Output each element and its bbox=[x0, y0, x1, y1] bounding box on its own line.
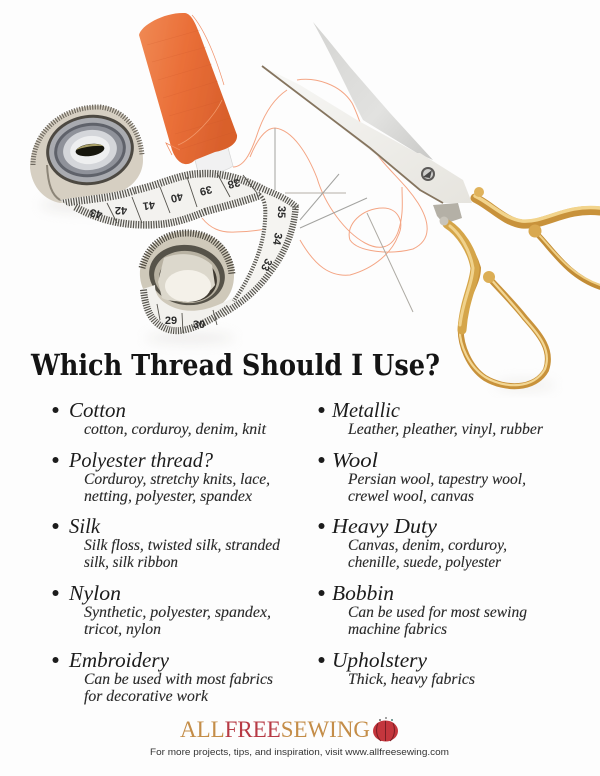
photo shadows bbox=[40, 197, 555, 390]
item: Embroidery: Embroidery bbox=[68, 648, 170, 672]
tape measure: numbers: 38 bbox=[226, 176, 241, 190]
item: Nylon: Synthetic, polyester, spandex, bbox=[84, 604, 271, 621]
item: Silk: Silk bbox=[69, 514, 101, 538]
scissors: left shank bbox=[433, 203, 462, 224]
item: Polyester thread: Corduroy, stretchy knits, lace, bbox=[84, 471, 270, 488]
item: Embroidery: Can be used with most fabrics bbox=[84, 671, 273, 688]
item: Wool bbox=[318, 448, 526, 505]
title: Which Thread Should I Use? bbox=[30, 348, 440, 382]
item: Heavy Duty: Heavy Duty bbox=[331, 514, 438, 538]
top roll: coil bbox=[42, 109, 138, 191]
tape measure: numbers: 39 bbox=[198, 183, 213, 197]
item: Heavy Duty bbox=[318, 514, 507, 571]
item: Nylon: Nylon bbox=[68, 581, 121, 605]
footer text: For more projects, tips, and inspiration, visit www.allfreesewing.com bbox=[150, 747, 449, 758]
item: Silk: silk, silk ribbon bbox=[84, 554, 178, 571]
item: Cotton: cotton, corduroy, denim, knit bbox=[84, 421, 267, 438]
item: Nylon: tricot, nylon bbox=[84, 621, 161, 638]
item: Wool: Persian wool, tapestry wool, bbox=[347, 471, 526, 488]
item: Upholstery: Upholstery bbox=[332, 648, 428, 672]
item: Metallic bbox=[318, 398, 544, 438]
thread spool bbox=[139, 13, 237, 174]
top roll: centre hole bbox=[75, 142, 105, 158]
item: Upholstery bbox=[318, 648, 475, 688]
tape measure: numbers: 30 bbox=[193, 319, 205, 331]
scissors: pivot screw bbox=[421, 167, 435, 181]
item: Wool: Wool bbox=[332, 448, 378, 472]
tape measure: top roll bbox=[30, 105, 143, 203]
scissors: rear blade bbox=[313, 22, 433, 160]
item: Heavy Duty: Canvas, denim, corduroy, bbox=[348, 537, 507, 554]
item: Wool: crewel wool, canvas bbox=[348, 488, 474, 505]
ribbon: middle section bbox=[60, 170, 267, 229]
footer logo wordmark: ALLFREESEWING bbox=[180, 717, 370, 742]
ribbon: right section bbox=[222, 186, 299, 318]
tape measure: numbers: 43 bbox=[89, 206, 103, 220]
scissors bbox=[262, 22, 600, 386]
item: Upholstery: Thick, heavy fabrics bbox=[348, 671, 475, 688]
photo: sewing supplies bbox=[30, 13, 600, 390]
tape measure: numbers: 40 bbox=[169, 190, 184, 204]
icon: pincushion bbox=[373, 717, 398, 742]
item: Metallic: Leather, pleather, vinyl, rubber bbox=[347, 421, 544, 438]
tape measure: numbers bbox=[89, 176, 287, 331]
ribbon: lower section bbox=[140, 285, 234, 334]
item: Polyester thread bbox=[52, 448, 270, 505]
item: Metallic: Metallic bbox=[331, 398, 401, 422]
scissors: right gold handle bbox=[474, 187, 600, 287]
item: Embroidery bbox=[52, 648, 273, 705]
tape measure: numbers: 29 bbox=[165, 315, 177, 327]
item: Nylon bbox=[52, 581, 271, 638]
tape measure: numbers: 35 bbox=[275, 206, 287, 218]
item: Embroidery: for decorative work bbox=[84, 688, 209, 705]
tape measure: bottom roll bbox=[140, 231, 234, 315]
item: Bobbin: Can be used for most sewing bbox=[348, 604, 527, 621]
right column: thread list bbox=[318, 398, 544, 688]
tape measure: numbers: 34 bbox=[270, 232, 284, 247]
item: Heavy Duty: chenille, suede, polyester bbox=[348, 554, 502, 571]
scissors: left gold handle bbox=[440, 216, 548, 386]
tape measure: numbers: 41 bbox=[142, 198, 156, 212]
ribbon: centimetre dividers bbox=[107, 173, 257, 333]
tape measure: numbers: 42 bbox=[115, 204, 127, 216]
tape measure: ribbon bbox=[55, 165, 305, 340]
top roll: outer band bbox=[30, 105, 143, 203]
item: Bobbin bbox=[318, 581, 527, 638]
threads and pins bbox=[202, 79, 427, 312]
item: Cotton bbox=[52, 398, 267, 438]
scissors: front blade bbox=[262, 66, 472, 203]
item: Cotton: Cotton bbox=[69, 398, 126, 422]
item: Polyester thread: netting, polyester, spandex bbox=[84, 488, 252, 505]
item: Bobbin: machine fabrics bbox=[348, 621, 447, 638]
item: Polyester thread: Polyester thread? bbox=[68, 448, 213, 472]
tape measure: numbers: 33 bbox=[258, 256, 274, 273]
scissors: blade edge bbox=[262, 66, 443, 203]
item: Bobbin: Bobbin bbox=[332, 581, 394, 605]
item: Silk bbox=[52, 514, 280, 571]
left column: thread list bbox=[52, 398, 280, 705]
item: Silk: Silk floss, twisted silk, stranded bbox=[84, 537, 280, 554]
